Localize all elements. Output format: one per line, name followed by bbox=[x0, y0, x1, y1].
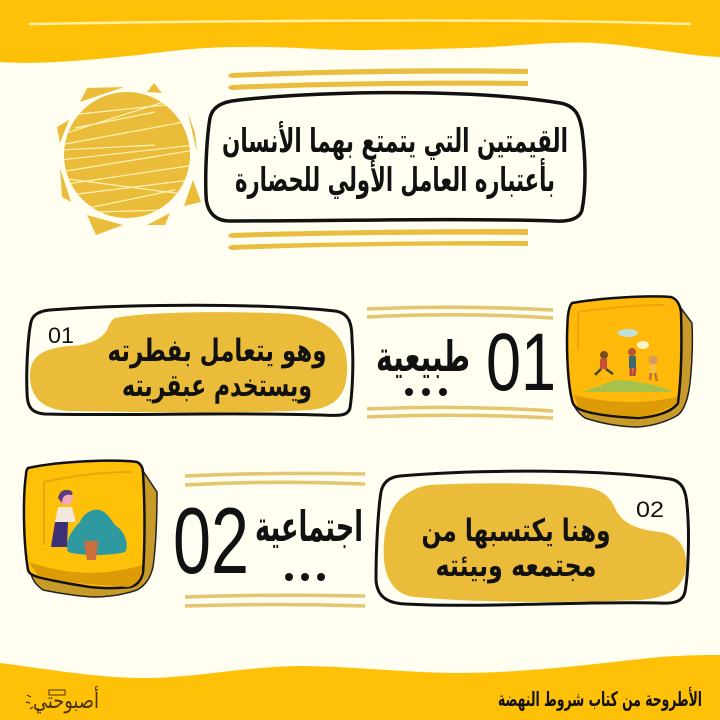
word: اجتماعية bbox=[255, 502, 363, 551]
icon: sun bbox=[57, 83, 201, 235]
label 01: 01 bbox=[48, 323, 74, 348]
number 02: 02 bbox=[173, 488, 249, 593]
description line 1: وهنا يكتسبها من bbox=[422, 513, 610, 549]
heading: 02 social bbox=[173, 488, 363, 593]
bush bbox=[67, 510, 127, 555]
row 1 decorative stripes bbox=[367, 307, 553, 418]
decorative stripes above the title box bbox=[228, 68, 528, 90]
children bbox=[595, 348, 658, 381]
title box bbox=[206, 93, 585, 221]
logo bbox=[26, 686, 99, 714]
title text line 2: بأعتباره العامل الأولي للحضارة bbox=[235, 158, 555, 200]
number 01: 01 bbox=[486, 317, 556, 408]
description line 2: ويستخدم عبقريته bbox=[122, 368, 312, 404]
cloud bbox=[618, 329, 638, 337]
panel: row 2 description bbox=[376, 471, 688, 605]
yellow blob bbox=[30, 312, 347, 412]
heading: 01 natural bbox=[376, 317, 556, 408]
logo: أصبوحتي bbox=[33, 686, 99, 714]
description line 1: وهو يتعامل بفطرته bbox=[108, 333, 326, 369]
word: طبيعية bbox=[376, 332, 470, 381]
icon: yellow card with gardener bbox=[24, 461, 157, 597]
top wave band bbox=[0, 0, 720, 63]
dots bbox=[405, 388, 447, 396]
label 02: 02 bbox=[636, 497, 664, 522]
icon: yellow card with jumping children bbox=[567, 296, 692, 427]
ground bbox=[583, 380, 672, 392]
pot bbox=[84, 541, 98, 560]
gardener bbox=[59, 491, 73, 505]
description line 2: مجتمعه وبيئته bbox=[436, 548, 596, 584]
dots bbox=[285, 573, 325, 581]
yellow blob bbox=[384, 483, 686, 602]
bottom wave band bbox=[0, 655, 720, 720]
row 2 decorative stripes bbox=[185, 473, 365, 606]
panel: row 1 description bbox=[27, 305, 353, 415]
decorative stripes below the title box bbox=[228, 229, 528, 250]
